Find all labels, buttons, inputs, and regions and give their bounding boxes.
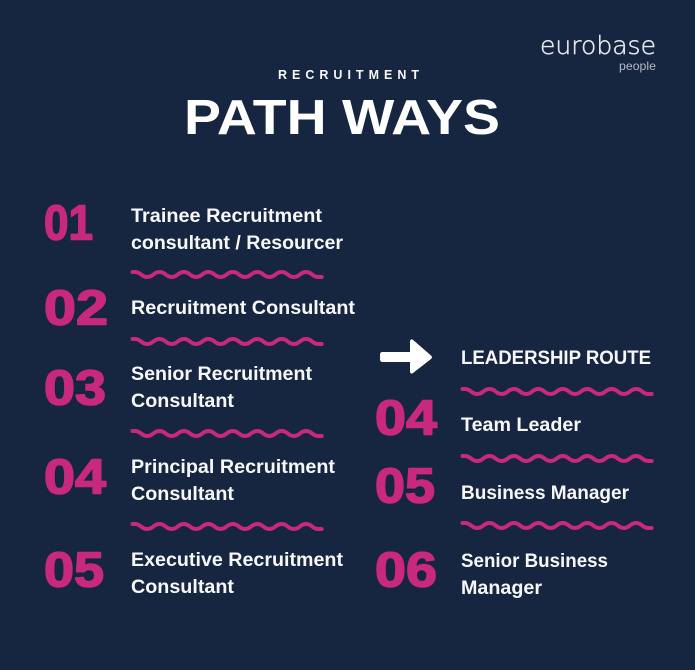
step 06 label: Manager: [461, 578, 543, 599]
step 01 number: 01: [44, 196, 93, 250]
panel: leadership route: [375, 348, 652, 599]
wavy divider: [462, 456, 652, 461]
step 03 number: 03: [44, 362, 106, 416]
step 04 label: Principal Recruitment: [131, 457, 336, 478]
wavy divider: [132, 524, 322, 529]
title: path ways: PATH WAYS: [184, 91, 500, 145]
wavy divider: [132, 431, 322, 436]
wavy divider: [462, 523, 652, 528]
icon: arrow to leadership route: [380, 339, 432, 374]
step 05 label: Business Manager: [461, 483, 630, 504]
step 04 number: 04: [44, 450, 106, 504]
step 03 label: [131, 364, 313, 412]
step 05 label: Executive Recruitment: [131, 550, 344, 571]
step 06 number: 06: [375, 544, 437, 598]
step 01 label: Trainee Recruitment: [131, 206, 323, 227]
step 04 label: Consultant: [131, 484, 235, 505]
heading: recruitment: RECRUITMENT: [278, 68, 419, 82]
step 05 number: 05: [44, 544, 104, 598]
logo: eurobase people: people: [619, 59, 656, 73]
logo: eurobase people: eurobase: [540, 31, 656, 60]
logo: eurobase people: [540, 31, 656, 73]
wavy divider: [132, 339, 322, 344]
step 05 label: Consultant: [131, 577, 235, 598]
step 03 label: Senior Recruitment: [131, 364, 313, 385]
step 04 number: 04: [375, 392, 437, 446]
step 03 label: Consultant: [131, 391, 235, 412]
step 02 label: Recruitment Consultant: [131, 298, 356, 319]
wavy divider: [132, 272, 322, 277]
step 05 number: 05: [375, 460, 435, 514]
step 04 label: [131, 457, 336, 505]
step 01 label: consultant / Resourcer: [131, 233, 344, 254]
step 06 label: [461, 551, 608, 599]
leadership route heading: LEADERSHIP ROUTE: [461, 348, 651, 369]
step 01 label: [131, 206, 344, 254]
wavy divider: [462, 389, 652, 394]
step 05 label: [131, 550, 344, 598]
step 02 number: 02: [44, 282, 108, 336]
step 04 label: Team Leader: [461, 415, 582, 436]
step 06 label: Senior Business: [461, 551, 608, 572]
panel: consultant route: [44, 196, 356, 598]
